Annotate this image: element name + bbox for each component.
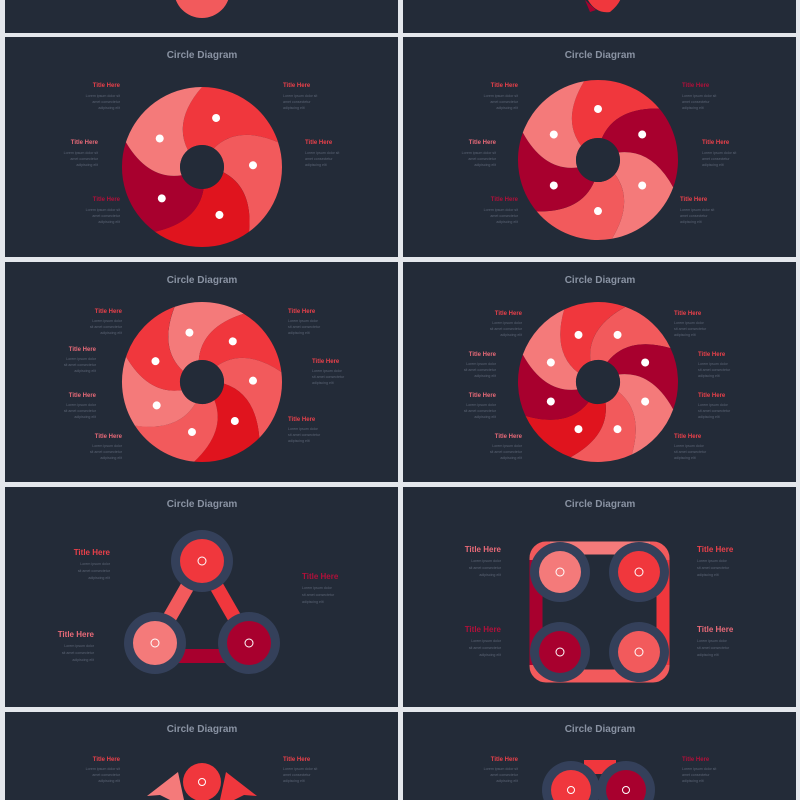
text blocks: right side (start): adipiscing elit	[302, 600, 324, 604]
text blocks: right side (start): Lorem ipsum dolor	[674, 444, 705, 448]
pinwheel 7	[108, 282, 302, 478]
text blocks: left-aligned to right edge (end): Lorem ipsum dolor sit	[484, 767, 518, 771]
text blocks: left-aligned to right edge (end): Title Here	[71, 140, 99, 146]
text blocks: right side (start): Title Here	[302, 572, 339, 581]
text blocks: left-aligned to right edge (end): sit amet consectetur	[464, 409, 497, 413]
text blocks: right side (start): Title Here	[283, 757, 311, 763]
text blocks: left-aligned to right edge (end): adipiscing elit	[500, 333, 522, 337]
text blocks: right side (start): adipiscing elit	[283, 779, 305, 783]
text blocks: right side (start): Lorem ipsum dolor	[698, 403, 729, 407]
text blocks: right side (start): adipiscing elit	[697, 573, 719, 577]
text blocks: right side (start): adipiscing elit	[697, 653, 719, 657]
text blocks: right side (start): Title Here	[698, 393, 726, 399]
text blocks: right side (start): sit amet consectetur	[697, 566, 730, 570]
text blocks: right side (start): adipiscing elit	[305, 163, 327, 167]
text blocks: right side (start)	[283, 83, 736, 783]
text blocks: left-aligned to right edge (end): adipiscing elit	[479, 653, 501, 657]
text blocks: left-aligned to right edge (end): adipiscing elit	[474, 163, 496, 167]
text blocks: left-aligned to right edge (end): Title Here	[95, 309, 123, 315]
text blocks: right side (start): adipiscing elit	[283, 106, 305, 110]
text blocks: right side (start): Title Here	[305, 140, 333, 146]
text blocks: right side (start): amet consectetur	[283, 773, 311, 777]
text blocks: left-aligned to right edge (end): adipiscing elit	[479, 573, 501, 577]
text blocks: right side (start): Title Here	[288, 309, 316, 315]
text blocks: left-aligned to right edge (end): adipiscing elit	[74, 415, 96, 419]
text blocks: right side (start): adipiscing elit	[680, 220, 702, 224]
text blocks: left-aligned to right edge (end): Lorem ipsum dolor	[64, 644, 95, 648]
text blocks: right side (start): Title Here	[682, 83, 710, 89]
text blocks: left-aligned to right edge (end): Lorem ipsum dolor	[471, 639, 502, 643]
titles: Circle Diagram	[167, 275, 237, 286]
text blocks: left-aligned to right edge (end): Lorem ipsum dolor sit	[86, 208, 120, 212]
text blocks: right side (start): amet consectetur	[682, 100, 710, 104]
text blocks: left-aligned to right edge (end): adipiscing elit	[496, 220, 518, 224]
text blocks: right side (start): Title Here	[682, 757, 710, 763]
text blocks: left-aligned to right edge (end): Lorem ipsum dolor	[492, 321, 523, 325]
titles	[167, 50, 635, 735]
text blocks: left-aligned to right edge (end): amet consectetur	[490, 100, 519, 104]
text blocks: left-aligned to right edge (end): sit amet consectetur	[62, 651, 95, 655]
text blocks: right side (start): Title Here	[697, 625, 734, 634]
text blocks: left-aligned to right edge (end): sit amet consectetur	[90, 325, 123, 329]
top partial diagrams	[174, 0, 622, 18]
text blocks: left-aligned to right edge (end): amet consectetur	[490, 214, 519, 218]
text blocks: right side (start): sit amet consectetur	[698, 368, 731, 372]
text blocks: right side (start): Lorem ipsum dolor	[312, 369, 343, 373]
text blocks: right side (start): Title Here	[702, 140, 730, 146]
text blocks: left-aligned to right edge (end): Title Here	[469, 352, 497, 358]
titles: Circle Diagram	[565, 50, 635, 61]
text blocks: right side (start): Lorem ipsum dolor sit	[702, 151, 736, 155]
text blocks: right side (start): adipiscing elit	[682, 106, 704, 110]
text blocks: right side (start): sit amet consectetur	[288, 433, 321, 437]
titles: Circle Diagram	[565, 275, 635, 286]
titles: Circle Diagram	[167, 724, 237, 735]
text blocks: left-aligned to right edge (end): sit amet consectetur	[64, 363, 97, 367]
bottom-left partial diagram	[147, 763, 257, 800]
text blocks: left-aligned to right edge (end): Title Here	[491, 757, 519, 763]
text blocks: left-aligned to right edge (end): Title Here	[69, 393, 97, 399]
text blocks: left-aligned to right edge (end): Title Here	[495, 311, 523, 317]
text blocks: left-aligned to right edge (end): Lorem ipsum dolor	[66, 357, 97, 361]
titles: Circle Diagram	[565, 499, 635, 510]
text blocks: left-aligned to right edge (end): Title Here	[465, 545, 502, 554]
text blocks: left-aligned to right edge (end): sit amet consectetur	[469, 566, 502, 570]
text blocks: left-aligned to right edge (end): adipiscing elit	[474, 415, 496, 419]
text blocks: left-aligned to right edge (end): Lorem ipsum dolor sit	[484, 208, 518, 212]
pinwheel 6	[509, 59, 687, 261]
text blocks: left-aligned to right edge (end): Lorem ipsum dolor	[466, 362, 497, 366]
text blocks: left-aligned to right edge (end): Lorem ipsum dolor	[492, 444, 523, 448]
text blocks: right side (start): Lorem ipsum dolor sit	[680, 208, 714, 212]
text blocks: right side (start): Lorem ipsum dolor	[288, 319, 319, 323]
titles: Circle Diagram	[167, 499, 237, 510]
text blocks: left-aligned to right edge (end): Lorem ipsum dolor sit	[86, 767, 120, 771]
text blocks: right side (start): Lorem ipsum dolor	[302, 586, 333, 590]
text blocks: right side (start): amet consectetur	[283, 100, 311, 104]
text blocks: right side (start): Title Here	[312, 359, 340, 365]
text blocks: left-aligned to right edge (end): adipiscing elit	[496, 779, 518, 783]
text blocks: right side (start): Title Here	[288, 417, 316, 423]
text blocks: right side (start): adipiscing elit	[702, 163, 724, 167]
text blocks: left-aligned to right edge (end): Title Here	[69, 347, 97, 353]
text blocks: right side (start): Title Here	[674, 311, 702, 317]
text blocks: right side (start): Lorem ipsum dolor	[697, 559, 728, 563]
text blocks: right side (start): Lorem ipsum dolor	[288, 427, 319, 431]
pinwheel 8	[500, 284, 696, 480]
text blocks: left-aligned to right edge (end): adipiscing elit	[496, 106, 518, 110]
text blocks: left-aligned to right edge (end): amet consectetur	[70, 157, 99, 161]
text blocks: right side (start): Lorem ipsum dolor sit	[305, 151, 339, 155]
text blocks: left-aligned to right edge (end): Title Here	[469, 140, 497, 146]
text blocks: left-aligned to right edge (end): adipiscing elit	[76, 163, 98, 167]
text blocks: right side (start): sit amet consectetur	[674, 450, 707, 454]
text blocks: right side (start): sit amet consectetur	[312, 375, 345, 379]
text blocks: left-aligned to right edge (end): adipiscing elit	[98, 106, 120, 110]
text blocks: left-aligned to right edge (end): amet consectetur	[490, 773, 519, 777]
text blocks: left-aligned to right edge (end): adipiscing elit	[474, 374, 496, 378]
text blocks: right side (start): amet consectetur	[702, 157, 730, 161]
text blocks: left-aligned to right edge (end): sit amet consectetur	[464, 368, 497, 372]
text blocks: right side (start): adipiscing elit	[698, 415, 720, 419]
text blocks: right side (start): Lorem ipsum dolor sit	[682, 767, 716, 771]
text blocks: right side (start): adipiscing elit	[312, 381, 334, 385]
text blocks: left-aligned to right edge (end): sit amet consectetur	[64, 409, 97, 413]
text blocks: right side (start): amet consectetur	[682, 773, 710, 777]
text blocks: left-aligned to right edge (end): Lorem ipsum dolor sit	[86, 94, 120, 98]
text blocks: left-aligned to right edge (end): Title Here	[95, 434, 123, 440]
text blocks: left-aligned to right edge (end): adipiscing elit	[74, 369, 96, 373]
text blocks: left-aligned to right edge (end): adipiscing elit	[500, 456, 522, 460]
text blocks: right side (start): Title Here	[680, 197, 708, 203]
text blocks: right side (start): Title Here	[674, 434, 702, 440]
text blocks: left-aligned to right edge (end): adipiscing elit	[72, 658, 94, 662]
triangle diagram	[124, 530, 280, 674]
bottom-right partial diagram	[542, 760, 655, 800]
text blocks: left-aligned to right edge (end): Title Here	[74, 548, 111, 557]
text blocks: left-aligned to right edge (end): Lorem ipsum dolor sit	[462, 151, 496, 155]
text blocks: left-aligned to right edge (end): Lorem ipsum dolor	[466, 403, 497, 407]
text blocks: right side (start): Lorem ipsum dolor sit	[682, 94, 716, 98]
text blocks: right side (start): sit amet consectetur	[674, 327, 707, 331]
text blocks: left-aligned to right edge (end): sit amet consectetur	[90, 450, 123, 454]
text blocks: left-aligned to right edge (end): Lorem ipsum dolor	[471, 559, 502, 563]
text blocks: left-aligned to right edge (end): Title Here	[93, 757, 121, 763]
text blocks: right side (start): Lorem ipsum dolor sit	[283, 94, 317, 98]
text blocks: left-aligned to right edge (end): Lorem ipsum dolor	[66, 403, 97, 407]
text blocks: left-aligned to right edge (end): amet consectetur	[92, 773, 121, 777]
text blocks: left-aligned to right edge (end): sit amet consectetur	[490, 327, 523, 331]
text blocks: left-aligned to right edge (end): adipiscing elit	[98, 220, 120, 224]
text blocks: left-aligned to right edge (end): Lorem ipsum dolor	[92, 444, 123, 448]
text blocks: right side (start): Lorem ipsum dolor	[697, 639, 728, 643]
text blocks: right side (start): sit amet consectetur	[302, 593, 335, 597]
text blocks: left-aligned to right edge (end): adipiscing elit	[100, 331, 122, 335]
titles: Circle Diagram	[167, 50, 237, 61]
text blocks: right side (start): adipiscing elit	[682, 779, 704, 783]
text blocks: right side (start): Title Here	[283, 83, 311, 89]
text blocks: right side (start): adipiscing elit	[698, 374, 720, 378]
square diagram	[530, 542, 669, 682]
text blocks: left-aligned to right edge (end): adipiscing elit	[98, 779, 120, 783]
text blocks: left-aligned to right edge (end): adipiscing elit	[88, 576, 110, 580]
text blocks: left-aligned to right edge (end): Title Here	[465, 625, 502, 634]
text blocks: left-aligned to right edge (end): Title Here	[93, 83, 121, 89]
text blocks: right side (start): adipiscing elit	[674, 456, 696, 460]
text blocks: left-aligned to right edge (end): adipiscing elit	[100, 456, 122, 460]
text blocks: left-aligned to right edge (end): Title Here	[93, 197, 121, 203]
text blocks: right side (start): sit amet consectetur	[698, 409, 731, 413]
text blocks: left-aligned to right edge (end): Lorem ipsum dolor sit	[64, 151, 98, 155]
text blocks: left-aligned to right edge (end): sit amet consectetur	[78, 569, 111, 573]
titles: Circle Diagram	[565, 724, 635, 735]
pinwheel 5	[115, 69, 302, 259]
text blocks: left-aligned to right edge (end)	[58, 83, 523, 783]
text blocks: left-aligned to right edge (end): Title Here	[58, 630, 95, 639]
text blocks: left-aligned to right edge (end): Lorem ipsum dolor sit	[484, 94, 518, 98]
text blocks: left-aligned to right edge (end): amet consectetur	[92, 100, 121, 104]
text blocks: left-aligned to right edge (end): sit amet consectetur	[490, 450, 523, 454]
text blocks: right side (start): Lorem ipsum dolor	[698, 362, 729, 366]
text blocks: left-aligned to right edge (end): amet consectetur	[468, 157, 497, 161]
text blocks: left-aligned to right edge (end): Title Here	[491, 83, 519, 89]
text blocks: right side (start): Lorem ipsum dolor sit	[283, 767, 317, 771]
text blocks: right side (start): adipiscing elit	[674, 333, 696, 337]
text blocks: right side (start): adipiscing elit	[288, 439, 310, 443]
text blocks: right side (start): sit amet consectetur	[697, 646, 730, 650]
text blocks: left-aligned to right edge (end): Title Here	[469, 393, 497, 399]
text blocks: right side (start): Lorem ipsum dolor	[674, 321, 705, 325]
text blocks: left-aligned to right edge (end): Title Here	[491, 197, 519, 203]
text blocks: right side (start): adipiscing elit	[288, 331, 310, 335]
text blocks: left-aligned to right edge (end): Title Here	[495, 434, 523, 440]
text blocks: left-aligned to right edge (end): amet consectetur	[92, 214, 121, 218]
text blocks: left-aligned to right edge (end): Lorem ipsum dolor	[80, 562, 111, 566]
text blocks: right side (start): sit amet consectetur	[288, 325, 321, 329]
text blocks: right side (start): Title Here	[698, 352, 726, 358]
text blocks: right side (start): amet consectetur	[680, 214, 708, 218]
text blocks: left-aligned to right edge (end): sit amet consectetur	[469, 646, 502, 650]
text blocks: left-aligned to right edge (end): Lorem ipsum dolor	[92, 319, 123, 323]
text blocks: right side (start): amet consectetur	[305, 157, 333, 161]
text blocks: right side (start): Title Here	[697, 545, 734, 554]
